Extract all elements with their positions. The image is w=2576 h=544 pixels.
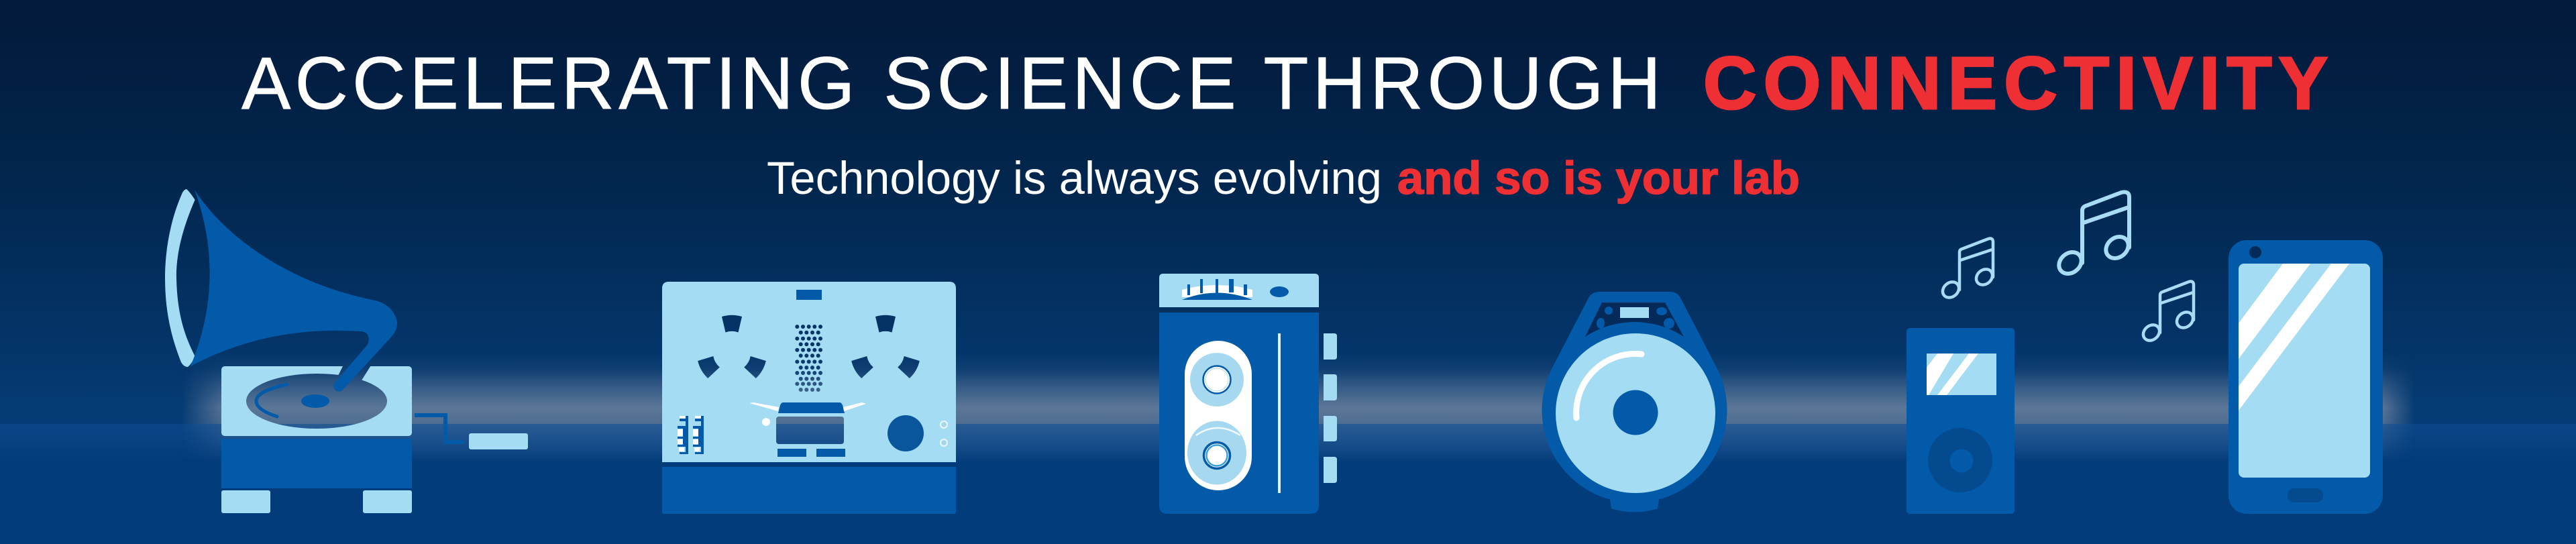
title: CONNECTIVITY bbox=[1703, 42, 2328, 125]
subtitle: and so is your lab bbox=[1397, 152, 1800, 204]
screen reflections bbox=[1927, 353, 1978, 395]
right foot bbox=[363, 490, 412, 513]
dial bbox=[1182, 279, 1252, 300]
indicator light bbox=[762, 418, 770, 426]
recorder base bbox=[662, 467, 956, 514]
small ring controls bbox=[941, 421, 947, 446]
player body bbox=[1159, 313, 1319, 514]
icon: gramophone bbox=[165, 189, 528, 513]
horn rim bbox=[165, 189, 195, 367]
oval button bbox=[1270, 286, 1289, 297]
tape lines bbox=[749, 402, 866, 411]
icon: CD player bbox=[1542, 292, 1727, 512]
tape head cover bbox=[778, 402, 845, 413]
tone arm redraw bbox=[333, 343, 371, 391]
top label bbox=[796, 290, 822, 300]
buttons bbox=[777, 449, 845, 457]
small note right bbox=[2140, 282, 2196, 343]
cabinet base bbox=[221, 439, 412, 488]
cassette window bbox=[1185, 341, 1252, 490]
camera bbox=[2249, 246, 2261, 258]
screen reflections bbox=[2239, 264, 2349, 411]
icon: music notes bbox=[1939, 192, 2196, 343]
player body bbox=[1542, 292, 1727, 503]
counter wheels left bbox=[678, 416, 688, 454]
home button bbox=[2288, 488, 2323, 502]
icon: smartphone bbox=[2229, 240, 2383, 514]
crank handle bbox=[469, 433, 528, 449]
subtitle: Technology is always evolving bbox=[767, 152, 1382, 204]
record label bbox=[301, 394, 329, 408]
disc hole bbox=[1613, 390, 1658, 435]
top tape reel bbox=[1190, 353, 1244, 406]
icon: MP3 player bbox=[1907, 328, 2015, 514]
icon: reel-to-reel tape recorder bbox=[662, 282, 956, 514]
phone body bbox=[2229, 240, 2383, 514]
left foot bbox=[221, 490, 270, 513]
counter wheels right bbox=[693, 416, 704, 454]
disc bbox=[1556, 333, 1715, 493]
click wheel bbox=[1928, 428, 1992, 492]
volume knob bbox=[888, 415, 924, 451]
subtitle bbox=[767, 152, 1800, 204]
player body bbox=[1907, 328, 2015, 514]
bottom tape reel bbox=[1187, 421, 1246, 484]
record groove bbox=[256, 384, 287, 417]
large note centre bbox=[2055, 192, 2133, 278]
player lid bbox=[1159, 274, 1319, 307]
control panel bbox=[1585, 303, 1684, 337]
stand bbox=[1610, 500, 1659, 512]
horn and neck bbox=[191, 190, 397, 391]
icon: cassette player bbox=[1159, 274, 1337, 514]
recorder front panel bbox=[662, 282, 956, 462]
wheel centre bbox=[1949, 449, 1974, 472]
title: ACCELERATING SCIENCE THROUGH bbox=[241, 42, 1661, 125]
disc highlight bbox=[1576, 354, 1642, 418]
small note left bbox=[1939, 239, 1996, 301]
title bbox=[241, 42, 2328, 125]
side buttons bbox=[1324, 333, 1337, 483]
crank arm bbox=[415, 415, 464, 442]
screen bbox=[1927, 353, 1996, 395]
cabinet top with turntable bbox=[221, 366, 412, 436]
vertical line bbox=[1278, 333, 1281, 493]
display bbox=[1620, 307, 1649, 318]
screen bbox=[2239, 264, 2370, 478]
panel buttons bbox=[1597, 307, 1674, 329]
